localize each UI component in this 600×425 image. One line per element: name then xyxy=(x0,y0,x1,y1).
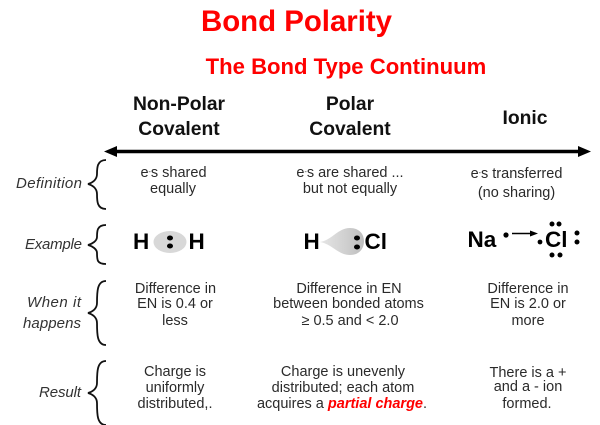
when: polar xyxy=(273,281,424,329)
definition: ionic: (no sharing) xyxy=(478,185,555,201)
example: H-Cl polar bond xyxy=(304,228,387,255)
result: ionic: formed. xyxy=(502,396,552,412)
row label: definition: Definition xyxy=(16,175,82,192)
result: polar xyxy=(257,364,427,412)
brace: result xyxy=(88,361,106,425)
row label: when it happens: When it xyxy=(27,294,82,311)
when: non-polar: Difference in xyxy=(135,281,216,297)
example: H-H bond: H xyxy=(188,229,205,254)
result: non-polar: uniformly xyxy=(146,380,205,396)
definition: ionic: s transferred xyxy=(481,166,562,182)
result: polar: Charge is unevenly xyxy=(281,364,406,380)
result: polar: acquires a partial charge. xyxy=(257,396,427,412)
definition: polar: but not equally xyxy=(303,181,398,197)
example: NaCl electron transfer: Cl xyxy=(545,227,568,252)
row label: result: Result xyxy=(39,384,82,401)
brace: example xyxy=(88,225,106,264)
brace: definition xyxy=(88,160,106,209)
continuum arrow xyxy=(104,146,591,157)
example: H-Cl polar bond: H xyxy=(304,229,320,254)
example: H-H bond xyxy=(133,229,205,254)
when: non-polar: EN is 0.4 or xyxy=(137,296,213,312)
definition: polar xyxy=(296,165,404,197)
column heading: non-polar covalent: Non-Polar xyxy=(133,94,226,115)
definition: non-polar: s shared xyxy=(151,165,207,181)
definition: non-polar: - xyxy=(149,169,152,176)
result: non-polar: distributed,. xyxy=(138,396,212,412)
row label: example: Example xyxy=(25,236,82,253)
definition: ionic: - xyxy=(479,170,482,177)
when: ionic: EN is 2.0 or xyxy=(490,296,566,312)
definition: non-polar xyxy=(140,165,207,197)
brace: when it happens xyxy=(88,281,106,345)
when: polar: between bonded atoms xyxy=(273,296,424,312)
column heading: polar covalent: Polar xyxy=(326,94,375,115)
when: ionic: more xyxy=(511,313,545,329)
column heading: non-polar covalent: Covalent xyxy=(138,119,220,140)
when: ionic xyxy=(487,281,569,329)
subtitle: The Bond Type Continuum xyxy=(206,54,486,79)
definition: non-polar: equally xyxy=(150,181,197,197)
definition: ionic xyxy=(471,166,562,201)
row label: when it happens xyxy=(23,294,82,332)
definition: non-polar: e xyxy=(140,165,149,181)
result: non-polar xyxy=(138,364,212,412)
when: polar: Difference in EN xyxy=(296,281,402,297)
definition: polar: e xyxy=(296,165,305,181)
definition: polar: s are shared ... xyxy=(307,165,404,181)
result: ionic xyxy=(490,365,566,412)
when: ionic: Difference in xyxy=(487,281,569,297)
result: ionic: and a - ion xyxy=(494,379,562,395)
row label: when it happens: happens xyxy=(23,315,82,332)
when: non-polar xyxy=(135,281,216,329)
column heading: ionic: Ionic xyxy=(502,108,548,129)
column heading: polar covalent xyxy=(309,94,391,140)
when: non-polar: less xyxy=(162,313,188,329)
result: non-polar: Charge is xyxy=(144,364,206,380)
column heading: polar covalent: Covalent xyxy=(309,119,391,140)
example: NaCl electron transfer xyxy=(468,222,580,258)
definition: ionic: e xyxy=(471,166,479,182)
example: NaCl electron transfer: Na xyxy=(468,227,497,252)
result: polar: distributed; each atom xyxy=(272,380,414,396)
when: polar: ≥ 0.5 and < 2.0 xyxy=(301,313,399,329)
title: Bond Polarity xyxy=(201,5,393,38)
result: ionic: There is a + xyxy=(490,365,566,381)
column heading: non-polar covalent xyxy=(133,94,226,140)
example: H-H bond: H xyxy=(133,229,149,254)
definition: polar: - xyxy=(305,169,308,176)
example: H-Cl polar bond: Cl xyxy=(364,229,387,254)
